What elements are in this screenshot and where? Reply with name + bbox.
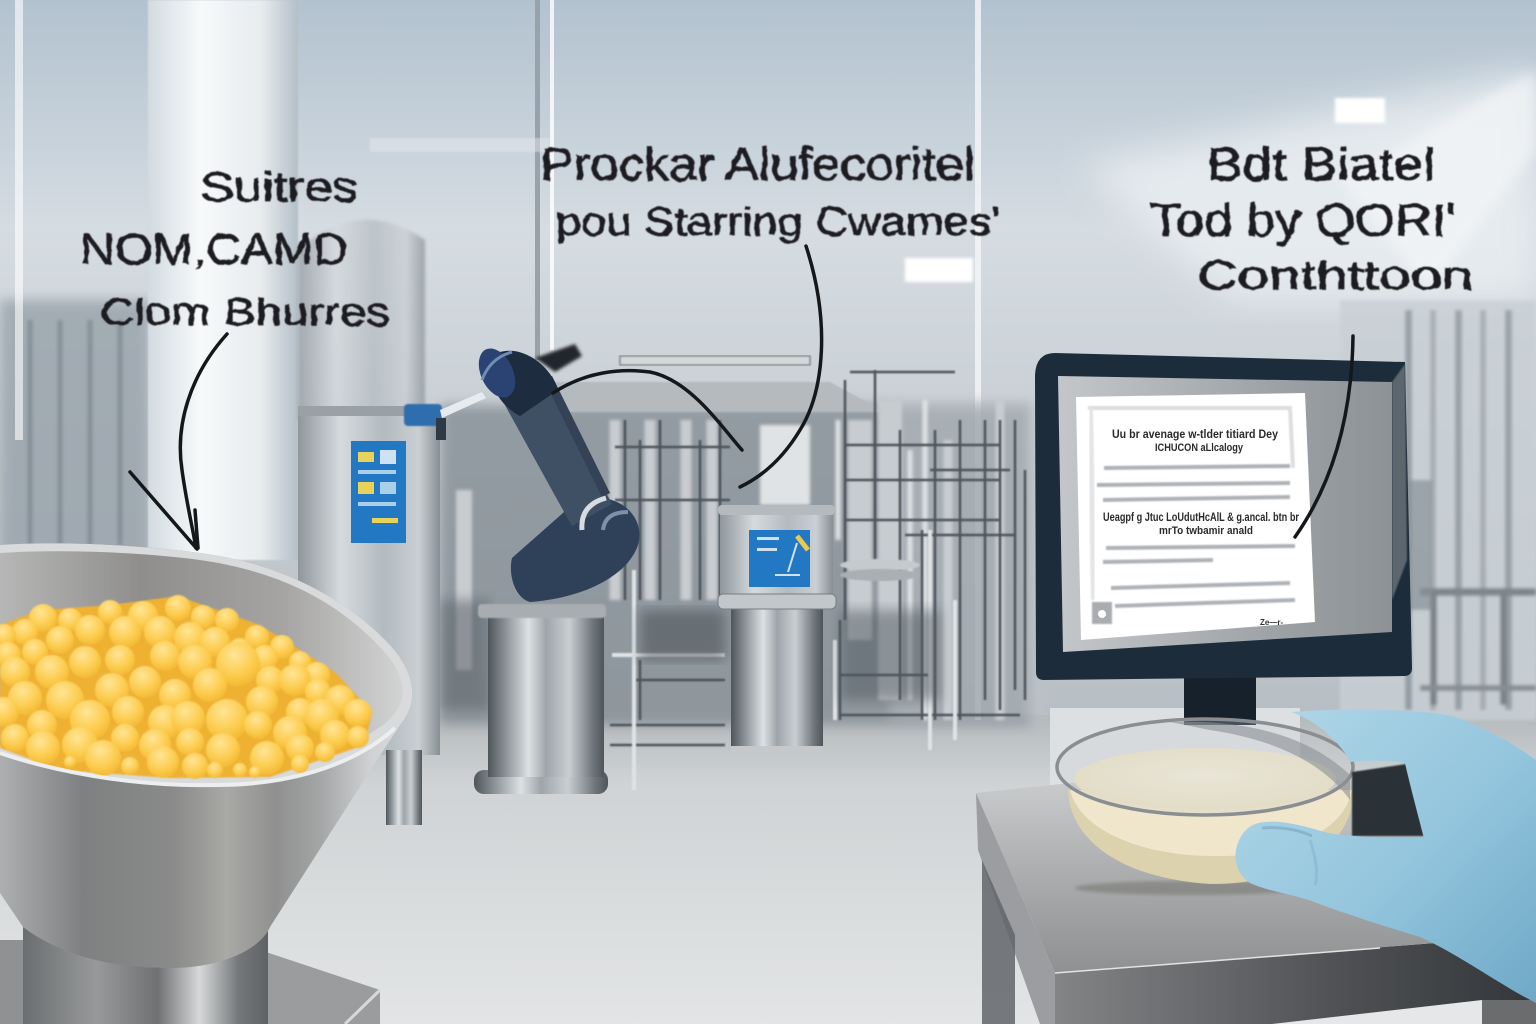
- document on screen: [1076, 393, 1315, 640]
- label: right callout: Tod by QORI': [1150, 194, 1456, 246]
- label: right callout: [1150, 138, 1473, 298]
- monitor: [1035, 353, 1412, 798]
- arrow: left callout to kernels: [130, 334, 227, 549]
- label: left callout: Clom Bhurres: [100, 292, 390, 334]
- label: centre callout: [540, 138, 1000, 244]
- document on screen: Ueagpf g Jtuc LoUdutHcAlL & g.ancal. btn br: [1103, 512, 1299, 524]
- label: left callout: [80, 163, 390, 334]
- hopper base: [0, 925, 380, 1024]
- arrow: right callout to document: [1295, 336, 1353, 537]
- floor: [0, 715, 1536, 1024]
- steel canister: [718, 505, 836, 754]
- glove: [1236, 709, 1536, 1003]
- tank label: [351, 441, 406, 543]
- label: left callout: Suitres: [200, 163, 358, 210]
- machinery rack: [440, 356, 1040, 790]
- arrow: robot arm to canister: [553, 371, 742, 450]
- left tank: [298, 406, 440, 825]
- arrow: centre callout to canister: [740, 246, 822, 487]
- table: [976, 780, 1536, 1024]
- document on screen: Ze—r-: [1260, 618, 1283, 627]
- label: left callout: NOM,CAMD: [80, 225, 348, 274]
- back tank: [298, 220, 425, 420]
- document on screen: ICHUCON aLlcalogy: [1155, 442, 1244, 454]
- document on screen: Uu br avenage w-tlder titiard Dey: [1112, 429, 1279, 441]
- steel drum: [474, 604, 608, 794]
- label: right callout: Conthttoon: [1197, 254, 1473, 298]
- background wall and ceiling: [0, 0, 1536, 760]
- label: centre callout: Prockar Alufecoritel: [540, 138, 975, 190]
- canister label: [749, 530, 810, 587]
- corn kernels: [0, 595, 372, 779]
- hopper bowl: [0, 543, 412, 968]
- petri dish: [1057, 719, 1354, 895]
- column: [148, 0, 298, 560]
- label: right callout: Bdt Biatel: [1207, 138, 1435, 190]
- pipes: [15, 0, 981, 720]
- label: centre callout: pou Starring Cwames': [556, 200, 1000, 244]
- document on screen: mrTo twbamir anald: [1159, 525, 1253, 537]
- robot arm: [404, 343, 639, 602]
- right wall stripes: [1340, 300, 1536, 720]
